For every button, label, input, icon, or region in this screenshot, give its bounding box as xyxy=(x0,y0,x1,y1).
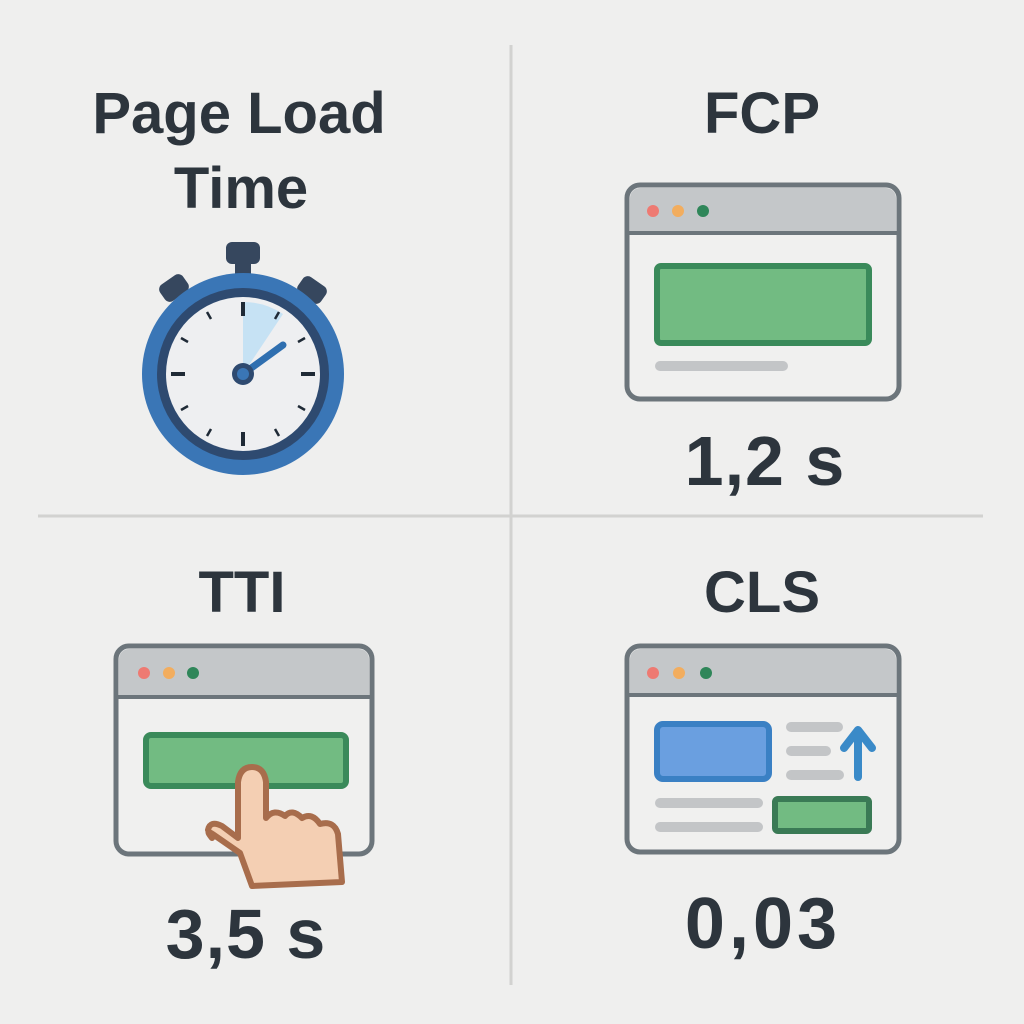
icon: TTI browser with hand xyxy=(116,646,372,886)
icon: FCP browser xyxy=(627,185,899,399)
icon: CLS browser xyxy=(627,646,899,852)
value: CLS: 0,03 xyxy=(685,884,841,964)
icon: stopwatch xyxy=(142,242,344,475)
value: TTI: 3,5 s xyxy=(166,895,326,973)
title: Page Load Time xyxy=(92,81,386,221)
title: Page Load Time: Time xyxy=(174,156,308,221)
title: Page Load Time: Page Load xyxy=(92,81,386,146)
title: CLS: CLS xyxy=(704,560,820,625)
title: TTI: TTI xyxy=(199,560,285,625)
icon: up arrow xyxy=(844,730,872,777)
icon: pointing hand xyxy=(208,767,342,886)
value: FCP: 1,2 s xyxy=(685,422,845,500)
title: FCP: FCP xyxy=(704,81,820,146)
